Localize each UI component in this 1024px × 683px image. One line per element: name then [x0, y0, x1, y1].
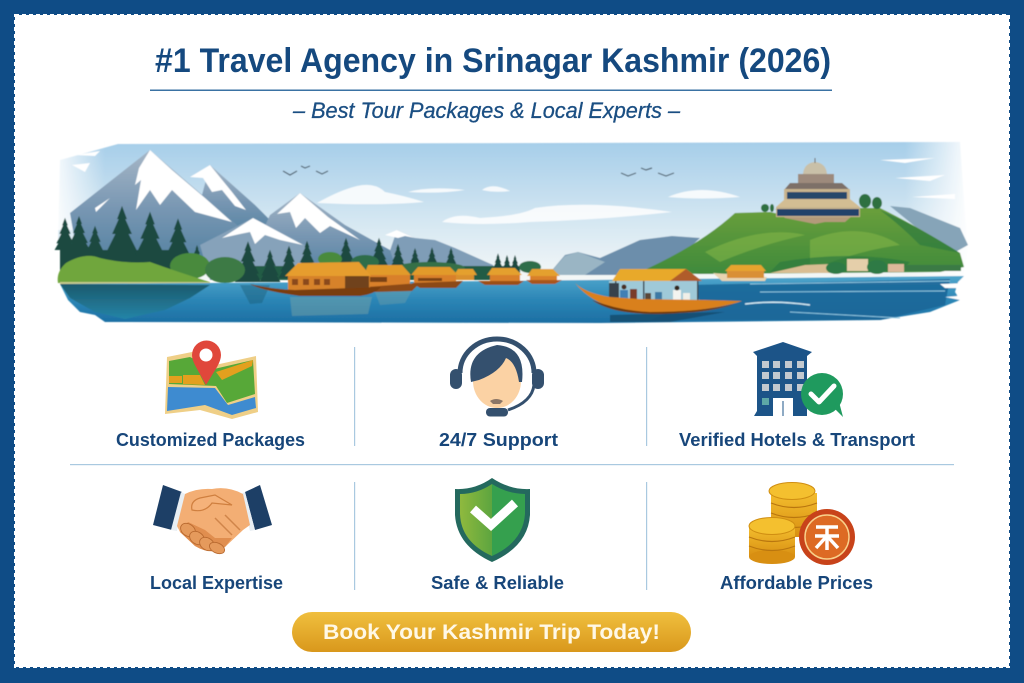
feature: Affordable Prices [720, 482, 873, 593]
feature: 24/7 Support [439, 339, 558, 450]
label: Verified Hotels & Transport [679, 430, 915, 450]
label: Customized Packages [116, 430, 305, 450]
sky [50, 140, 971, 285]
icon: coin stacks [749, 482, 855, 565]
label: Safe & Reliable [431, 573, 564, 593]
icon: map with pin [165, 340, 258, 419]
houseboat 1b [364, 265, 420, 292]
houseboat 1 [250, 262, 381, 296]
birds [283, 166, 674, 176]
call-to-action button: Book Your Kashmir Trip Today! [323, 621, 660, 644]
houseboat 4 [478, 268, 524, 285]
illustration: Dal Lake panorama [50, 140, 971, 323]
call-to-action button [292, 612, 691, 652]
label: 24/7 Support [439, 430, 558, 450]
dividers [70, 347, 954, 590]
hilltop palace [761, 158, 882, 217]
lake reflections [60, 279, 950, 322]
shoreline with cottages [770, 259, 961, 274]
title: #1 Travel Agency in Srinagar Kashmir (2026) [155, 42, 831, 80]
houseboat 5 [526, 269, 562, 284]
shikara boat [575, 269, 742, 314]
feature: Verified Hotels & Transport [679, 342, 915, 450]
far hills [548, 236, 700, 275]
icon: handshake [153, 485, 272, 556]
brush-stroke edge wisps [60, 151, 970, 322]
title underline [150, 90, 832, 91]
subtitle: – Best Tour Packages & Local Experts – [292, 98, 681, 123]
icon: headset agent [450, 339, 544, 416]
icon: shield with check [455, 478, 530, 562]
houseboat 3 [454, 269, 477, 280]
label: Local Expertise [150, 573, 283, 593]
label: Affordable Prices [720, 573, 873, 593]
left grassy bank [58, 256, 210, 283]
houseboats [250, 262, 562, 296]
right hill [640, 208, 964, 274]
tree line [55, 206, 521, 282]
lake [60, 276, 964, 323]
feature: Local Expertise [150, 485, 283, 593]
houseboat 2 [411, 267, 463, 288]
mountains [70, 150, 500, 280]
clouds [317, 185, 740, 224]
feature: Customized Packages [116, 340, 305, 450]
snow caps [95, 150, 415, 245]
icon: hotel with check bubble [753, 342, 843, 417]
feature: Safe & Reliable [431, 478, 564, 593]
distant boat [713, 265, 767, 281]
